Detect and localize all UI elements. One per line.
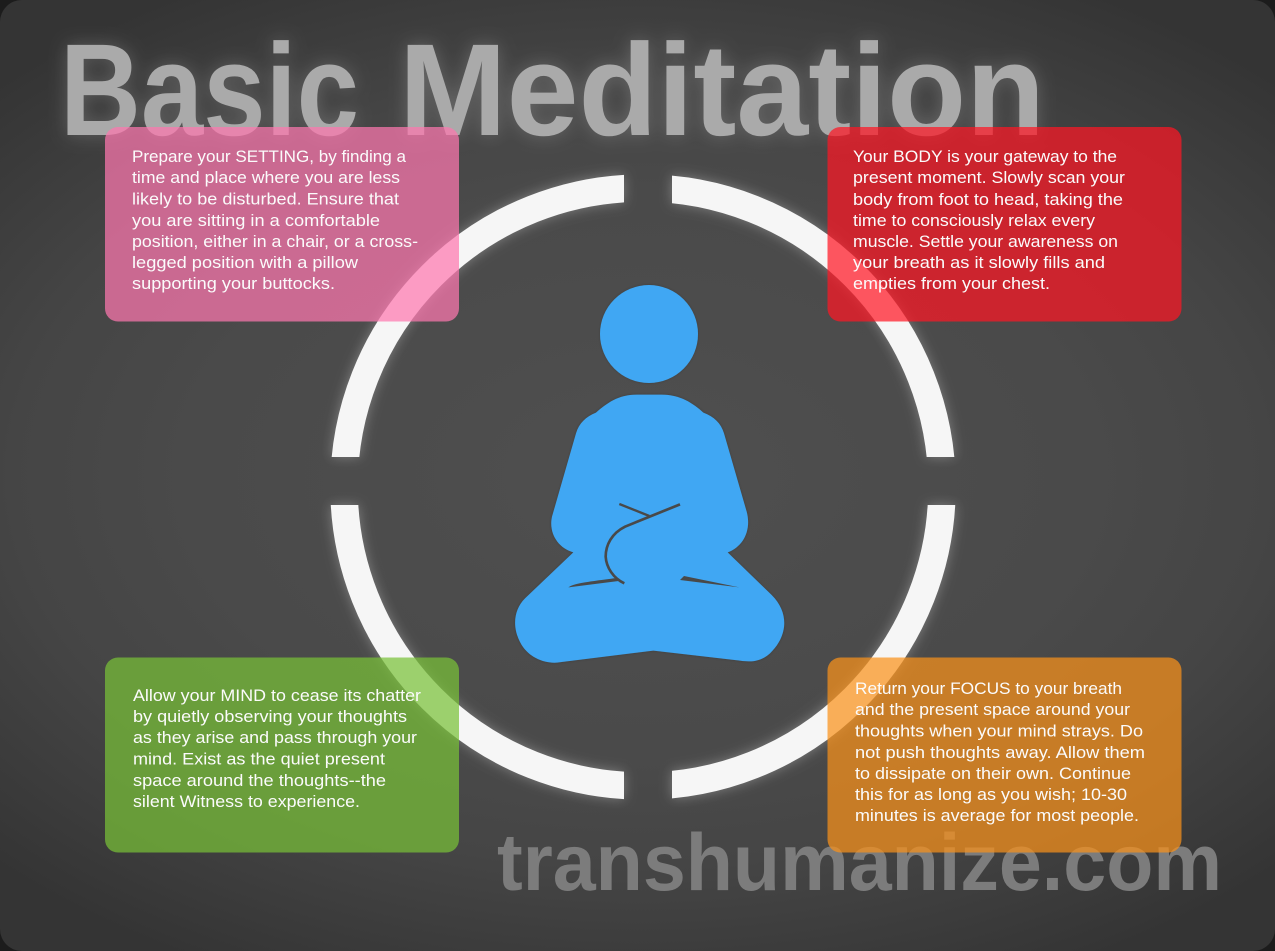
figure arm and leg lines — [606, 504, 680, 583]
setting text: supporting your buttocks. — [132, 275, 335, 293]
setting text: legged position with a pillow — [132, 254, 358, 272]
mind text: by quietly observing your thoughts — [133, 708, 407, 726]
focus text — [855, 680, 1145, 825]
mind text: as they arise and pass through your — [133, 729, 418, 747]
setting text: position, either in a chair, or a cross- — [132, 233, 418, 251]
setting text: time and place where you are less — [132, 169, 400, 187]
icon: meditating figure — [515, 285, 784, 663]
mind text: Allow your MIND to cease its chatter — [133, 687, 422, 705]
body text: your breath as it slowly fills and — [853, 254, 1105, 272]
panel: focus — [828, 658, 1182, 852]
body text: Your BODY is your gateway to the — [853, 148, 1117, 166]
mind text: mind. Exist as the quiet present — [133, 750, 385, 768]
title: Meditation — [399, 16, 1045, 163]
panel: mind — [105, 658, 459, 852]
focus text: and the present space around your — [855, 701, 1131, 719]
mind text: silent Witness to experience. — [133, 793, 360, 811]
mind text: space around the thoughts--the — [133, 772, 386, 790]
setting text: you are sitting in a comfortable — [132, 212, 380, 230]
focus text: this for as long as you wish; 10-30 — [855, 786, 1127, 804]
focus text: thoughts when your mind strays. Do — [855, 722, 1143, 740]
focus text: minutes is average for most people. — [855, 807, 1139, 825]
body text: empties from your chest. — [853, 275, 1050, 293]
focus text: not push thoughts away. Allow them — [855, 744, 1145, 762]
setting text: Prepare your SETTING, by finding a — [132, 148, 407, 166]
panel: body — [828, 127, 1182, 322]
mind text — [133, 687, 422, 811]
body text: time to consciously relax every — [853, 212, 1096, 230]
body text — [853, 148, 1126, 293]
segmented ring — [344, 188, 942, 786]
setting text: likely to be disturbed. Ensure that — [132, 190, 399, 208]
figure head — [600, 285, 698, 383]
body text: body from foot to head, taking the — [853, 191, 1123, 209]
figure body — [515, 395, 784, 663]
body text: muscle. Settle your awareness on — [853, 233, 1118, 251]
focus text: Return your FOCUS to your breath — [855, 680, 1122, 698]
body text: present moment. Slowly scan your — [853, 169, 1126, 187]
panel: setting — [105, 127, 459, 322]
website watermark: transhumanize.com — [497, 818, 1222, 908]
setting text — [132, 148, 418, 293]
focus text: to dissipate on their own. Continue — [855, 765, 1131, 783]
title — [60, 16, 1045, 163]
title: Basic — [60, 16, 359, 163]
